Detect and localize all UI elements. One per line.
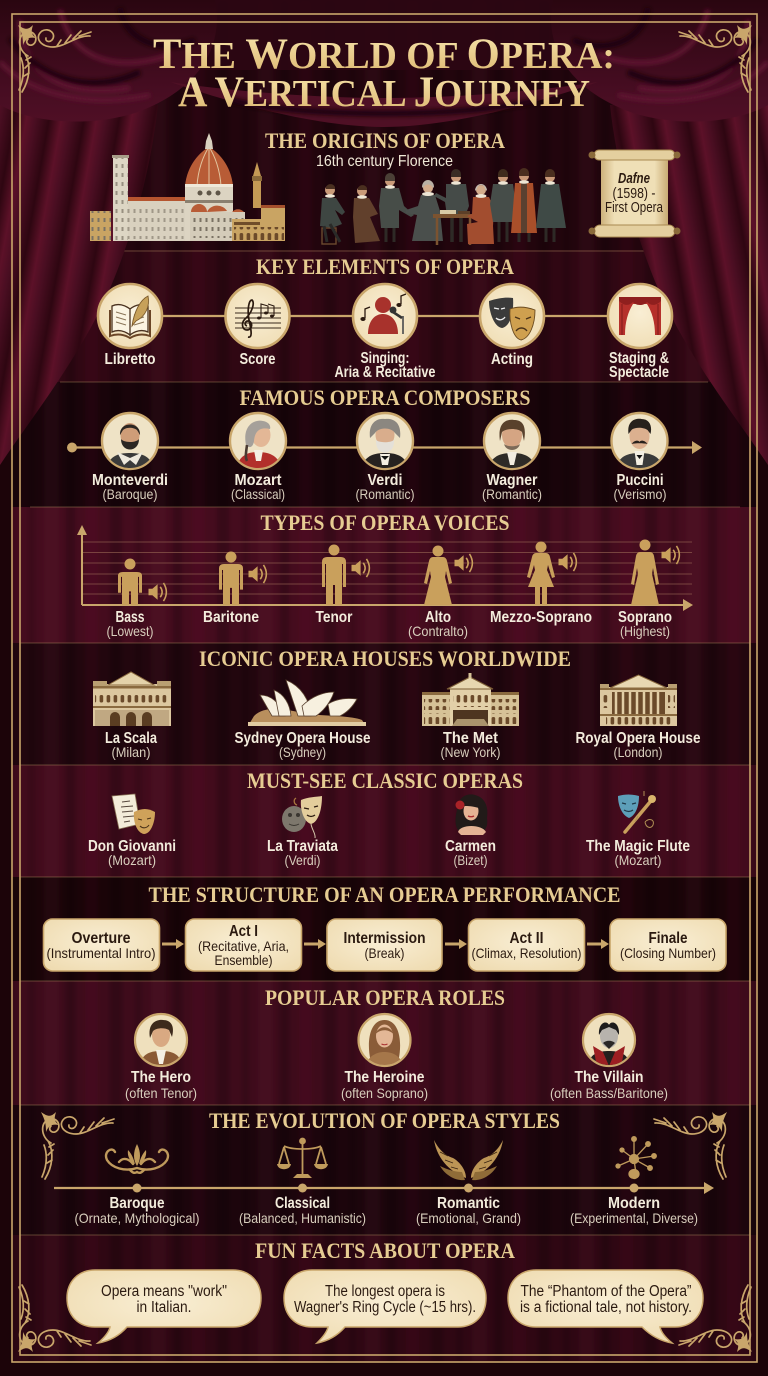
label: Verdi: (Romantic): [356, 486, 414, 502]
panel: roles: [125, 985, 668, 1101]
box: Overture: Overture: [72, 930, 131, 947]
subheading: Florence: 16th century Florence: [316, 153, 453, 170]
scroll: Dafne: [588, 150, 680, 237]
label: Mozart: Mozart: [234, 472, 282, 489]
label: Royal Opera House: Royal Opera House: [576, 730, 701, 747]
label: The Magic Flute: [586, 838, 690, 868]
speech bubble: Ring Cycle: The longest opera is: [325, 1283, 445, 1300]
icon: acting: [480, 284, 544, 348]
figure: alto: [424, 546, 472, 605]
heading: key elements: KEY ELEMENTS OF OPERA: [256, 254, 515, 279]
box: Act II: (Climax, Resolution): [472, 945, 582, 961]
label: Alto: (Contralto): [408, 623, 468, 639]
icon: The Met: [422, 673, 519, 726]
portrait: The Heroine: [358, 1014, 410, 1068]
label: The Villain: (often Bass/Baritone): [550, 1085, 668, 1101]
label: Monteverdi: (Baroque): [102, 486, 158, 502]
icon: baroque ornament: [106, 1144, 168, 1173]
figure: baritone: [219, 552, 266, 605]
figure: soprano: [631, 540, 679, 605]
label: Mozart: (Classical): [231, 486, 285, 502]
label: Singing: Singing:: [360, 350, 410, 367]
label: Romantic: (Emotional, Grand): [416, 1210, 521, 1226]
label: Royal Opera House: (London): [614, 744, 662, 760]
icon: modern network: [616, 1137, 656, 1178]
label: The Hero: (often Tenor): [125, 1085, 197, 1101]
heading: fun facts: FUN FACTS ABOUT OPERA: [255, 1238, 516, 1263]
title: THE WORLD OF OPERA:: [153, 31, 615, 78]
icon: Don Giovanni: [112, 794, 155, 834]
label: The Met: [440, 730, 500, 760]
label: Alto: [408, 609, 468, 639]
title: [153, 31, 615, 116]
panel: opera houses: [93, 646, 701, 760]
portrait: Monteverdi: [102, 413, 158, 471]
panel: evolution: [54, 1108, 714, 1226]
label: Tenor: Tenor: [316, 609, 352, 626]
label: Puccini: (Verismo): [614, 486, 666, 502]
label: Soprano: Soprano: [618, 609, 672, 626]
heading: performance structure: THE STRUCTURE OF AN OPERA PERFORMANCE: [148, 882, 620, 907]
label: Don Giovanni: Don Giovanni: [88, 838, 176, 855]
label: Wagner: [482, 472, 542, 502]
label: The Hero: The Hero: [131, 1069, 191, 1086]
icon: Carmen: [456, 794, 487, 835]
portrait: The Villain: [583, 1014, 635, 1068]
speech bubble: work: [67, 1270, 261, 1343]
label: Singing: Aria & Recitative: [334, 364, 436, 381]
label: Alto: Alto: [425, 609, 451, 626]
label: Libretto: Libretto: [104, 351, 156, 368]
scroll: Dafne: First Opera: [605, 199, 664, 216]
arrow: [304, 939, 326, 949]
label: Verdi: Verdi: [368, 472, 402, 489]
label: The Hero: [125, 1069, 197, 1101]
label: Romantic: [416, 1195, 521, 1226]
box: Act I: [186, 919, 302, 971]
label: La Traviata: [267, 838, 338, 868]
panel: origins: [90, 128, 680, 245]
label: Modern: [570, 1195, 698, 1226]
label: Soprano: (Highest): [620, 623, 670, 639]
chart: voice range axes: [77, 525, 693, 611]
heading: classic operas: MUST-SEE CLASSIC OPERAS: [247, 768, 523, 793]
box: Overture: (Instrumental Intro): [46, 945, 156, 961]
timeline arrow: [67, 441, 702, 454]
label: Sydney Opera House: (Sydney): [279, 744, 326, 760]
label: Wagner: Wagner: [486, 472, 538, 489]
panel: composers: [67, 385, 702, 502]
box: Intermission: [327, 919, 442, 971]
label: La Traviata: La Traviata: [267, 838, 338, 855]
label: Staging: Staging &: [609, 350, 669, 367]
label: The Heroine: The Heroine: [344, 1069, 425, 1086]
label: Acting: Acting: [491, 351, 533, 368]
title: A VERTICAL JOURNEY: [178, 69, 590, 116]
label: Classical: [239, 1195, 366, 1226]
box: Intermission: (Break): [364, 945, 404, 961]
label: La Scala: [105, 730, 157, 760]
label: Staging: [609, 350, 669, 381]
figure: bass: [118, 558, 166, 605]
label: Score: Score: [240, 351, 276, 368]
speech bubble: work: in Italian.: [136, 1299, 192, 1316]
label: Romantic: Romantic: [437, 1195, 500, 1212]
box: Act I: (Recitative, Aria,: [198, 938, 289, 954]
box: Intermission: Intermission: [344, 930, 426, 947]
portrait: The Hero: [135, 1014, 187, 1068]
label: Royal Opera House: [576, 730, 701, 760]
label: Classical: (Balanced, Humanistic): [239, 1210, 366, 1226]
icon: Sydney Opera House: [248, 680, 366, 726]
speech bubble: work: Opera means "work": [101, 1283, 227, 1300]
heading: origins: THE ORIGINS OF OPERA: [265, 128, 506, 153]
label: Mezzo-Soprano: Mezzo-Soprano: [490, 609, 592, 626]
icon: Royal Opera House: [600, 675, 677, 726]
label: Staging: Spectacle: [609, 364, 669, 381]
label: The Magic Flute: The Magic Flute: [586, 838, 690, 855]
box: Act II: Act II: [510, 930, 544, 947]
scroll: Dafne: Dafne: [618, 170, 650, 187]
panel: fun facts: [67, 1238, 703, 1343]
icon: libretto: [98, 284, 162, 348]
panel: classic operas: [88, 768, 690, 868]
arrow: [445, 939, 467, 949]
timeline arrow: [54, 1182, 714, 1194]
label: Mozart: [231, 472, 285, 502]
label: Bass: [106, 609, 154, 639]
label: La Scala: La Scala: [105, 730, 157, 747]
label: Baroque: Baroque: [110, 1195, 165, 1212]
heading: opera houses: ICONIC OPERA HOUSES WORLDWIDE: [199, 646, 571, 671]
label: Puccini: Puccini: [616, 472, 664, 489]
label: Carmen: Carmen: [445, 838, 496, 855]
label: Singing: [334, 350, 436, 381]
box: Finale: (Closing Number): [620, 945, 716, 961]
connector line: [130, 315, 640, 317]
illustration: Florentine Camerata group: [320, 168, 566, 245]
figure: mezzo-soprano: [527, 542, 576, 605]
portrait: Wagner: [484, 413, 540, 471]
box: Finale: Finale: [648, 930, 688, 947]
panel: key elements: [98, 254, 672, 381]
label: Don Giovanni: [88, 838, 176, 868]
icon: score: [226, 284, 290, 348]
portrait: Verdi: [357, 413, 413, 471]
label: Soprano: [618, 609, 672, 639]
arrow: [587, 939, 609, 949]
heading: evolution: THE EVOLUTION OF OPERA STYLES: [209, 1108, 560, 1133]
box: Overture: [44, 919, 160, 971]
label: Sydney Opera House: [234, 730, 371, 760]
speech bubble: Phantom: The “Phantom of the Opera”: [520, 1283, 692, 1300]
label: Sydney Opera House: Sydney Opera House: [234, 730, 371, 747]
label: La Scala: (Milan): [112, 744, 150, 760]
icon: staging: [608, 284, 672, 348]
heading: composers: FAMOUS OPERA COMPOSERS: [240, 385, 530, 410]
label: Baritone: Baritone: [203, 609, 259, 626]
speech bubble: Ring Cycle: [284, 1270, 486, 1343]
label: Puccini: [614, 472, 666, 502]
label: Monteverdi: [92, 472, 168, 502]
label: Verdi: [356, 472, 414, 502]
figure: tenor: [322, 544, 369, 605]
icon: La Scala: [93, 672, 171, 726]
label: Bass: Bass: [116, 609, 145, 626]
icon: La Traviata: [282, 796, 322, 838]
box: Act I: Act I: [229, 923, 258, 940]
label: Wagner: (Romantic): [482, 486, 542, 502]
label: The Villain: [550, 1069, 668, 1101]
label: The Met: The Met: [443, 730, 499, 747]
curtains: [0, 0, 768, 465]
panel: performance structure: [44, 882, 726, 971]
arrow: [162, 939, 184, 949]
label: The Villain: The Villain: [574, 1069, 644, 1086]
label: Monteverdi: Monteverdi: [92, 472, 168, 489]
icon: wings: [434, 1140, 503, 1180]
speech bubble: Phantom: [508, 1270, 703, 1343]
icon: singing: [353, 284, 417, 348]
label: Baroque: (Ornate, Mythological): [74, 1210, 200, 1226]
label: Baroque: [74, 1195, 200, 1226]
speech bubble: Phantom: is a fictional tale, not history.: [520, 1299, 692, 1316]
heading: roles: POPULAR OPERA ROLES: [265, 985, 505, 1010]
label: The Heroine: [341, 1069, 428, 1101]
portrait: Puccini: [612, 413, 668, 471]
label: The Met: (New York): [440, 744, 500, 760]
scroll: Dafne: (1598) -: [612, 185, 656, 202]
label: Carmen: (Bizet): [454, 852, 488, 868]
heading: voices: TYPES OF OPERA VOICES: [260, 510, 510, 535]
label: Classical: Classical: [275, 1195, 330, 1212]
label: The Heroine: (often Soprano): [341, 1085, 428, 1101]
portrait: Mozart: [230, 413, 286, 471]
label: Carmen: [445, 838, 496, 868]
speech bubble: Ring Cycle: Wagner's Ring Cycle (~15 hrs).: [294, 1299, 476, 1316]
label: Modern: (Experimental, Diverse): [570, 1210, 698, 1226]
label: La Traviata: (Verdi): [284, 852, 320, 868]
label: Modern: Modern: [608, 1195, 660, 1212]
box: Finale: [610, 919, 726, 971]
illustration: Florence skyline: [90, 133, 285, 241]
label: Bass: (Lowest): [106, 623, 154, 639]
label: Don Giovanni: (Mozart): [108, 852, 156, 868]
icon: scales: [277, 1138, 328, 1178]
box: Act I: Ensemble): [214, 952, 272, 968]
box: Act II: [468, 919, 584, 971]
panel: voices: [77, 510, 693, 639]
label: The Magic Flute: (Mozart): [614, 852, 662, 868]
icon: Magic Flute: [618, 791, 656, 832]
